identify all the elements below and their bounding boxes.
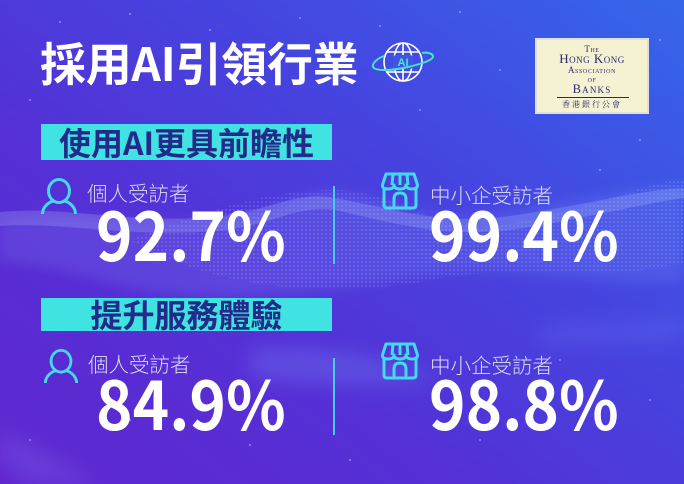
icon: AI globe: AI (398, 57, 408, 69)
label: individual respondents: 個人受訪者 (88, 348, 190, 378)
icon: person (41, 178, 77, 214)
stat: 84.9%: 84.9% (96, 353, 286, 450)
stat: 98.8%: 98.8% (429, 353, 619, 450)
divider (333, 358, 335, 435)
logo: The Hong Kong Association of Banks: Hong Kong (559, 51, 625, 66)
heading band: 提升服務體驗 (41, 298, 332, 331)
logo: The Hong Kong Association of Banks (535, 38, 649, 114)
logo: The Hong Kong Association of Banks: Banks (573, 82, 611, 96)
icon: AI globe (372, 42, 434, 82)
heading band: 提升服務體驗: 提升服務體驗 (90, 291, 282, 337)
icon: storefront (381, 172, 419, 210)
divider (333, 186, 335, 264)
label: individual respondents: 個人受訪者 (87, 177, 190, 207)
stat: 99.4%: 99.4% (429, 184, 619, 281)
logo: The Hong Kong Association of Banks: of (588, 74, 596, 84)
label: SME respondents: 中小企受訪者 (430, 179, 553, 209)
label: SME respondents: 中小企受訪者 (430, 349, 553, 379)
stat: 92.7%: 92.7% (96, 184, 286, 281)
logo: The Hong Kong Association of Banks: 香港銀行公會 (562, 99, 622, 110)
logo: The Hong Kong Association of Banks: Association (568, 65, 616, 75)
logo: The Hong Kong Association of Banks: The (584, 44, 600, 54)
icon: storefront (381, 342, 419, 380)
icon: person (44, 349, 78, 383)
heading band: 使用AI更具前瞻性: 使用AI更具前瞻性 (59, 119, 314, 165)
title: 採用AI引領行業 (40, 29, 358, 95)
